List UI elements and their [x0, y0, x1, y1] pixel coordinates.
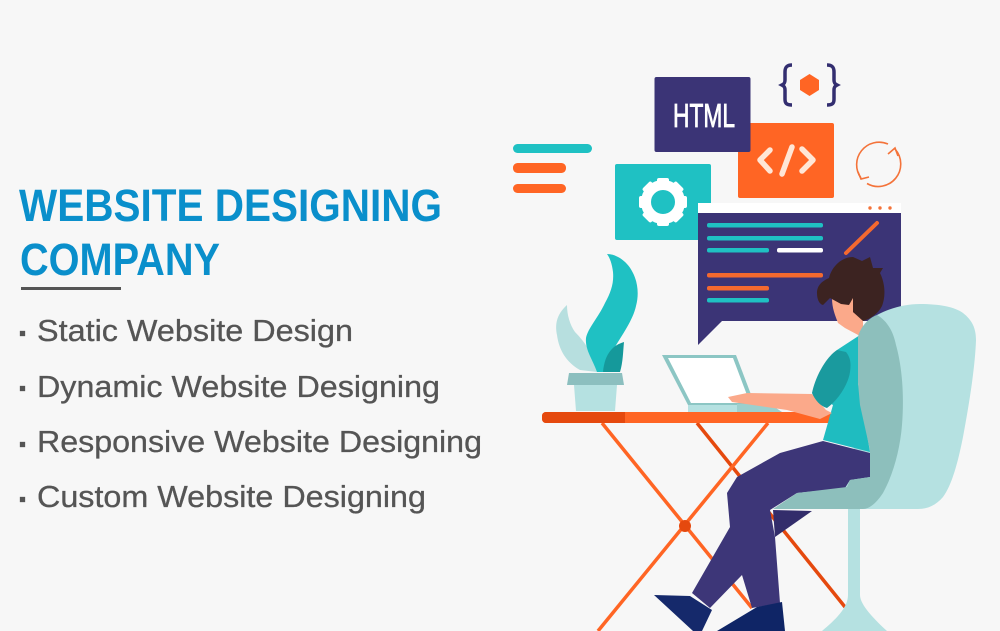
chair seat and inner shell	[773, 315, 903, 509]
icon: HTML tile	[654, 77, 750, 152]
title	[19, 180, 442, 285]
icon: HTML tile: HTML	[673, 97, 735, 134]
table top	[542, 412, 832, 423]
service list	[20, 313, 482, 514]
far leg	[773, 510, 812, 537]
plant pot	[567, 373, 624, 411]
trousers	[692, 441, 870, 608]
chair stem	[822, 509, 887, 631]
laptop	[662, 355, 782, 412]
shoes	[654, 595, 785, 631]
title: COMPANY	[20, 234, 220, 285]
title underline	[21, 287, 121, 290]
list item: dynamic: Dynamic Website Designing	[37, 369, 440, 404]
list item: custom: Custom Website Designing	[37, 479, 426, 514]
list item: static: Static Website Design	[37, 313, 353, 348]
sleeve	[812, 350, 851, 408]
shirt	[812, 335, 870, 452]
list item: responsive: Responsive Website Designing	[37, 424, 482, 459]
hair	[817, 257, 884, 321]
plant	[556, 254, 638, 411]
chair back	[773, 304, 976, 509]
icon: orange code tile	[738, 123, 834, 198]
arm	[728, 393, 832, 419]
icon: teal gear tile	[615, 164, 711, 240]
table legs	[598, 423, 845, 631]
browser speech bubble	[698, 203, 901, 345]
face and neck	[832, 298, 863, 336]
person	[654, 257, 884, 631]
title: WEBSITE DESIGNING	[19, 180, 442, 231]
icon: curly braces with hexagon	[782, 65, 837, 105]
icon: menu lines	[513, 144, 592, 193]
icon: refresh arrows	[857, 142, 901, 187]
